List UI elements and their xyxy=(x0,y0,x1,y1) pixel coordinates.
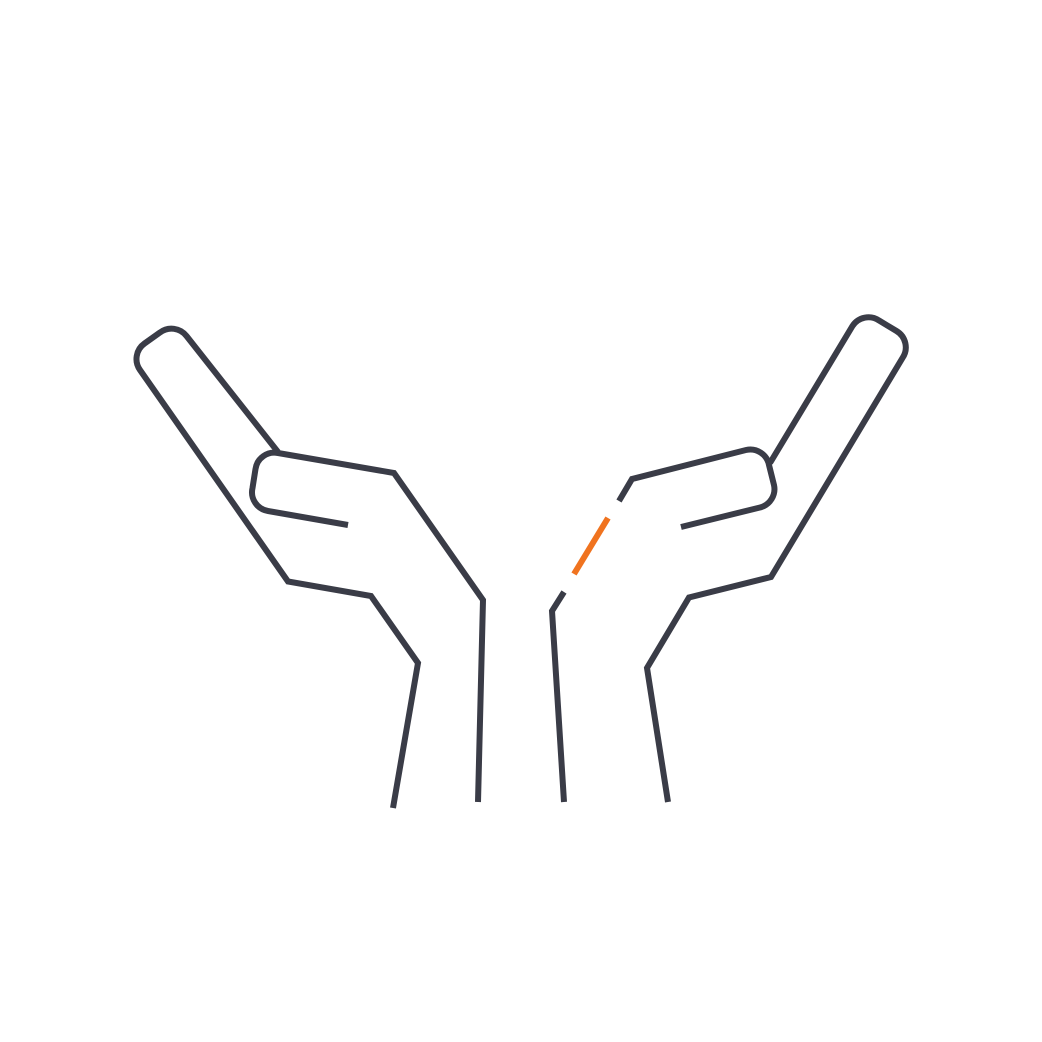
left hand outline xyxy=(136,329,483,808)
right hand outline xyxy=(552,317,906,802)
orange accent stroke xyxy=(574,518,608,574)
